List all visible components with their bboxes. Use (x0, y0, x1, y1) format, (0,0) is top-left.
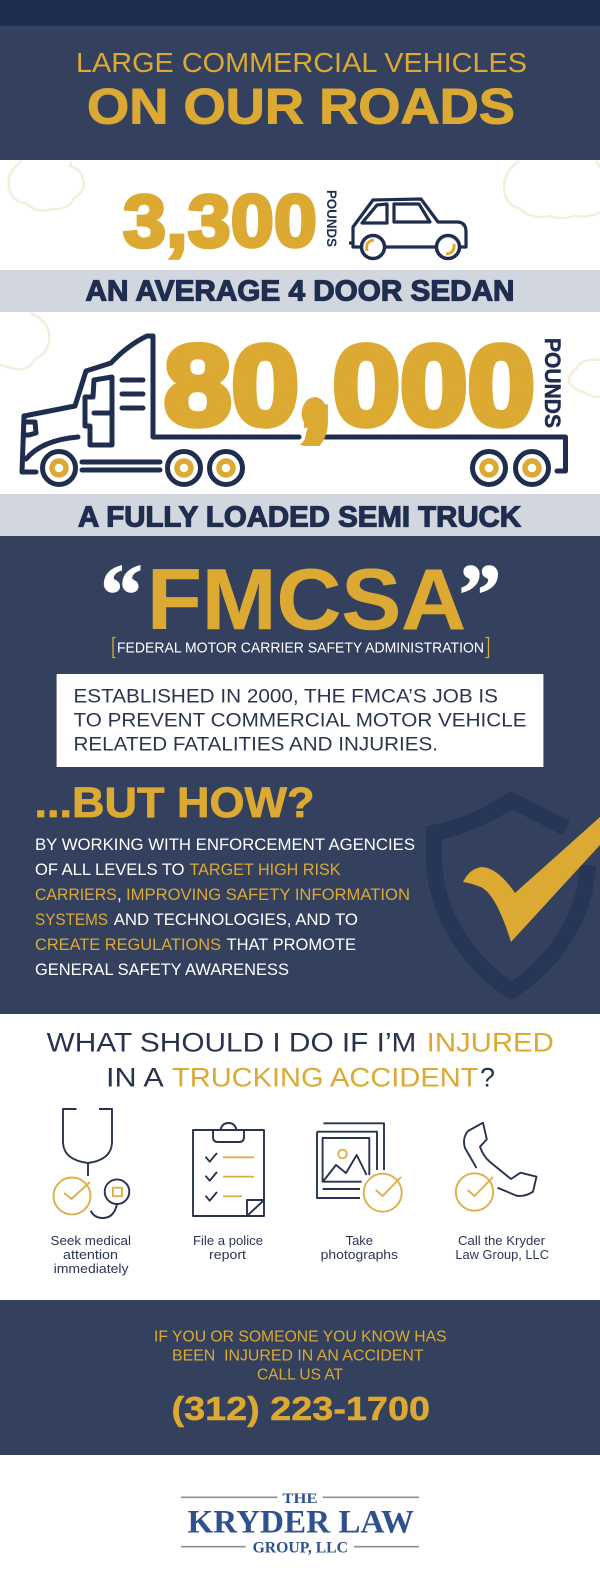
icon: clipboard (193, 1123, 264, 1216)
call to action text: CALL US AT (257, 1366, 344, 1383)
truck caption: A FULLY LOADED SEMI TRUCK (78, 502, 521, 534)
step: call the law group: Call the Kryder (458, 1233, 546, 1248)
cloud right (504, 161, 600, 218)
sedan pounds label: POUNDS (324, 190, 340, 247)
panel: top band and title (0, 0, 600, 160)
panel: FMCSA (0, 536, 600, 1014)
icon: shield (434, 800, 600, 991)
panel: semi truck weight (0, 312, 600, 494)
section heading: INJURED (427, 1028, 554, 1058)
cloud right partial (569, 360, 600, 397)
section heading (47, 1028, 554, 1093)
panel: what should I do (0, 1014, 600, 1300)
step: take photographs (317, 1123, 402, 1262)
logo the: THE (282, 1491, 318, 1507)
but how paragraph: THAT PROMOTE (226, 935, 356, 954)
callout: established box (57, 674, 543, 767)
but how heading: ...BUT HOW? (34, 779, 314, 827)
but how paragraph: OF ALL LEVELS TO (35, 860, 184, 879)
icon: photographs (317, 1123, 402, 1212)
icon: telephone (456, 1123, 536, 1211)
FMCSA heading: FMCSA (147, 552, 466, 648)
cloud left partial (0, 313, 49, 370)
but how paragraph: CREATE REGULATIONS (35, 935, 221, 954)
step: seek medical attention (50, 1109, 131, 1276)
bracketed full name: FEDERAL MOTOR CARRIER SAFETY ADMINISTRATION (117, 640, 484, 656)
call to action text: IF YOU OR SOMEONE YOU KNOW HAS (154, 1328, 447, 1345)
but how paragraph: IMPROVING SAFETY INFORMATION (126, 885, 410, 904)
call to action text (154, 1328, 447, 1383)
but how paragraph: GENERAL SAFETY AWARENESS (35, 960, 289, 979)
callout: established box: ESTABLISHED IN 2000, THE FMCA’S JOB IS (74, 686, 498, 708)
truck pounds label: POUNDS (540, 338, 565, 428)
truck weight number: 80,000 (164, 322, 535, 448)
panel: truck caption band (0, 494, 600, 536)
sedan caption: AN AVERAGE 4 DOOR SEDAN (86, 276, 514, 308)
but how paragraph: CARRIERS (35, 885, 117, 904)
logo group llc: GROUP, LLC (253, 1540, 348, 1557)
truck hubs (52, 461, 539, 475)
title line 2: ON OUR ROADS (87, 78, 515, 134)
truck wheels (42, 452, 548, 484)
step: take photographs: photographs (321, 1247, 399, 1262)
section heading: WHAT SHOULD I DO IF I’M (47, 1028, 416, 1058)
but how paragraph: TARGET HIGH RISK (190, 860, 341, 879)
opening quote mark: “ (100, 546, 142, 642)
callout: established box: RELATED FATALITIES AND INJURIES. (74, 734, 438, 756)
panel: logo (0, 1455, 600, 1596)
icon: sedan car (349, 199, 466, 258)
cloud left (9, 161, 84, 211)
step: call the law group (455, 1123, 549, 1262)
but how paragraph: AND TECHNOLOGIES, AND TO (114, 910, 358, 929)
step: seek medical attention: Seek medical (50, 1233, 131, 1248)
closing quote mark: ” (459, 546, 501, 642)
step: seek medical attention: immediately (54, 1261, 129, 1276)
section heading: TRUCKING ACCIDENT (172, 1063, 478, 1093)
comma tail (302, 397, 327, 446)
but how paragraph: , (117, 885, 122, 904)
step: file a police report: report (209, 1247, 246, 1262)
section heading: ? (480, 1063, 495, 1093)
phone number: (312) 223-1700 (172, 1391, 430, 1428)
panel: sedan weight (0, 160, 600, 270)
step: call the law group: Law Group, LLC (455, 1247, 549, 1262)
but how paragraph (35, 835, 415, 979)
panel: sedan caption band (0, 270, 600, 312)
icon: semi truck (22, 336, 566, 484)
sedan weight number: 3,300 (123, 180, 317, 262)
title line 1: LARGE COMMERCIAL VEHICLES (76, 47, 527, 78)
icon: stethoscope (54, 1109, 129, 1218)
step: file a police report (193, 1123, 264, 1262)
callout: established box: TO PREVENT COMMERCIAL MOTOR VEHICLE (74, 710, 526, 732)
step: seek medical attention: attention (63, 1247, 118, 1262)
step: take photographs: Take (346, 1233, 373, 1248)
panel: call to action (0, 1300, 600, 1455)
call to action text: BEEN INJURED IN AN ACCIDENT (172, 1347, 424, 1364)
step: file a police report: File a police (193, 1233, 263, 1248)
section heading: IN A (106, 1063, 164, 1093)
logo rules (181, 1497, 419, 1547)
but how paragraph: BY WORKING WITH ENFORCEMENT AGENCIES (35, 835, 415, 854)
but how paragraph: SYSTEMS (35, 910, 108, 929)
logo kryder law: KRYDER LAW (188, 1505, 414, 1541)
